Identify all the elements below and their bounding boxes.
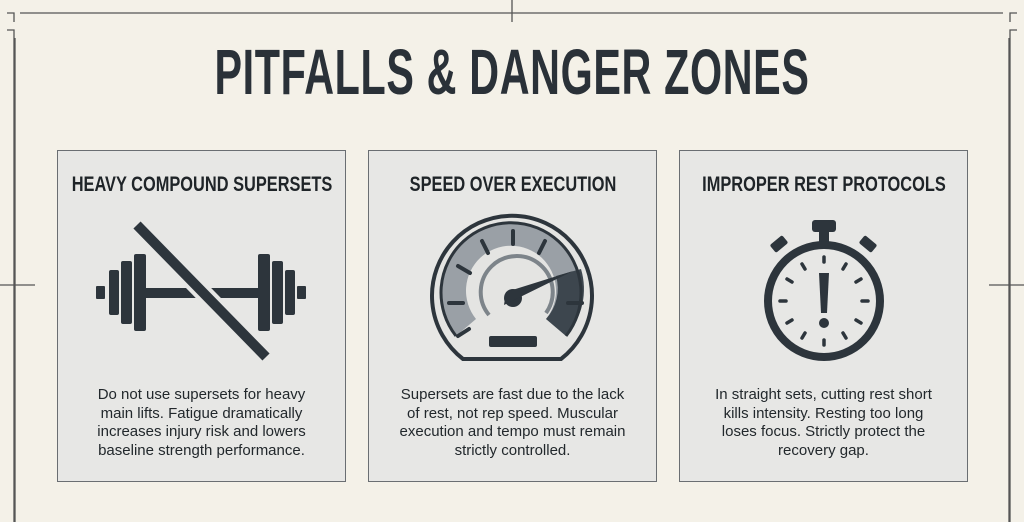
heading: IMPROPER REST PROTOCOLS <box>702 173 945 196</box>
icon: speedometer <box>430 214 594 361</box>
panel: heavy compound supersets <box>57 150 346 482</box>
title: PITFALLS & DANGER ZONES <box>214 36 810 108</box>
panel: speed over execution <box>368 150 657 482</box>
text: Do not use supersets for heavy main lifts. Fatigue dramatically increases injury risk and lowers baseline strength performance. <box>97 386 306 459</box>
panel: improper rest protocols <box>679 150 968 482</box>
icon: stopwatch <box>764 220 884 361</box>
heading: SPEED OVER EXECUTION <box>409 173 616 196</box>
text: Supersets are fast due to the lack of rest, not rep speed. Muscular execution and tempo must remain strictly controlled. <box>400 386 625 459</box>
heading: HEAVY COMPOUND SUPERSETS <box>71 173 332 196</box>
icon: crossed barbell <box>96 222 306 360</box>
text: In straight sets, cutting rest short kills intensity. Resting too long loses focus. Strictly protect the recovery gap. <box>715 386 932 459</box>
